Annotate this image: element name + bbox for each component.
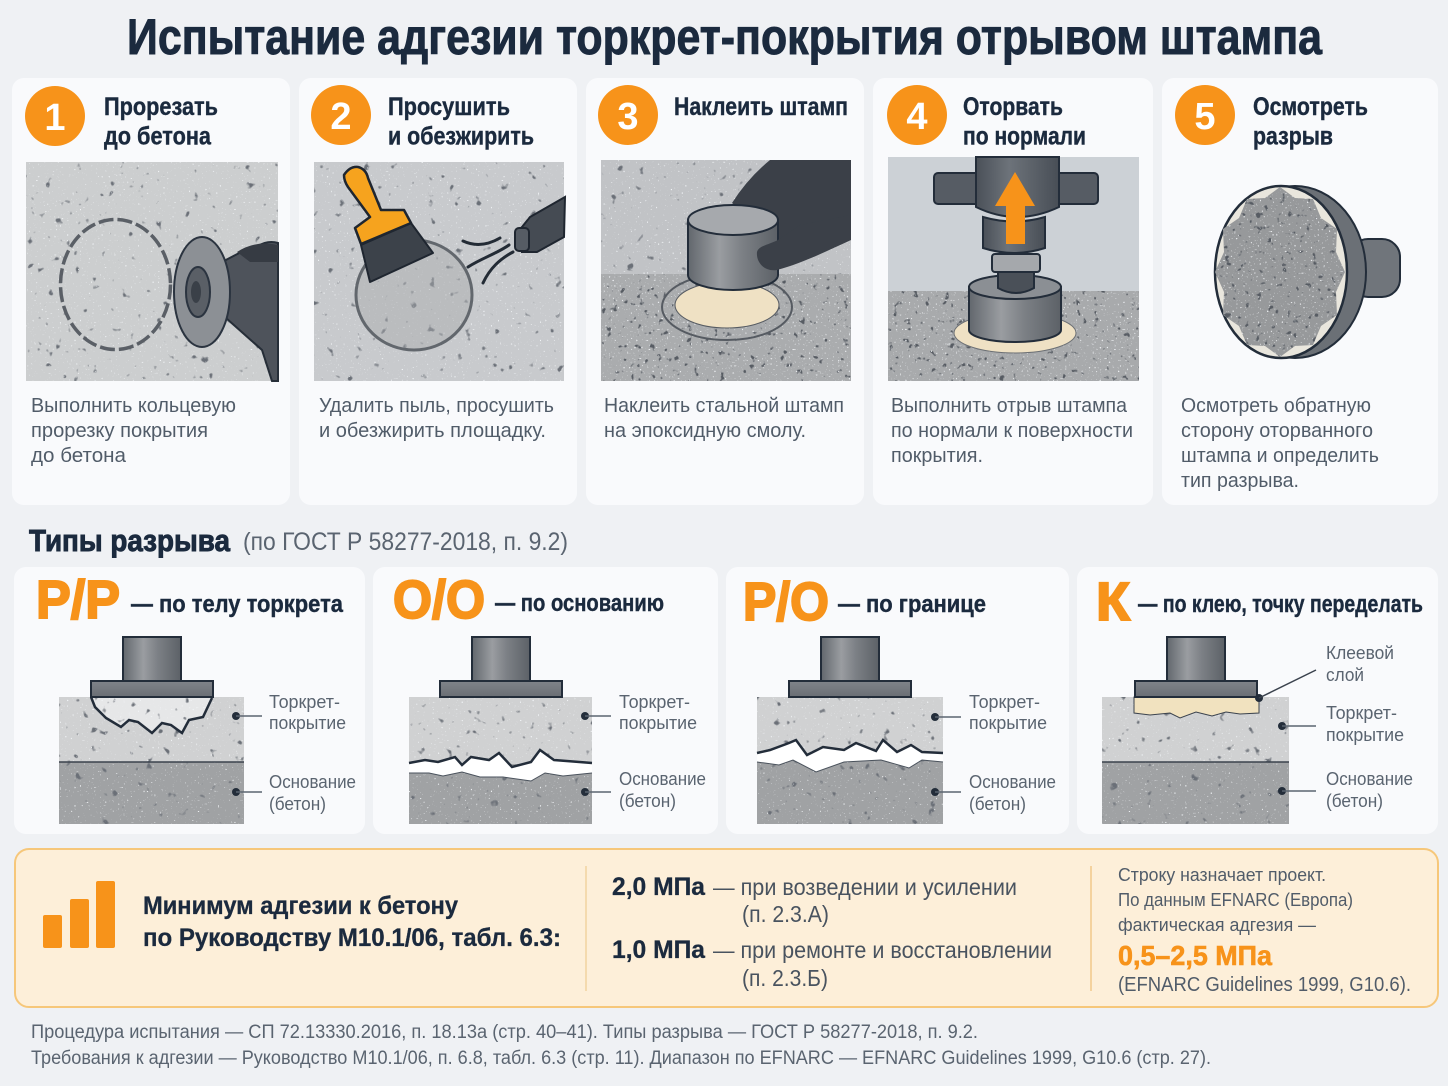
labels with leader lines: Торкрет- — [1326, 702, 1397, 723]
panel: К failure — [1077, 567, 1438, 834]
labels with leader lines: слой — [1326, 664, 1364, 685]
panel: adhesion requirements — [15, 849, 1438, 1007]
illustration: torn-off dolly — [1215, 186, 1400, 358]
step number 5: 5 — [1194, 96, 1216, 138]
requirement values: (п. 2.3.Б) — [742, 965, 828, 991]
step number 4 — [887, 85, 947, 145]
step text 3: Наклеить стальной штамп — [604, 395, 844, 417]
step text 2 — [319, 395, 554, 442]
requirement values: (п. 2.3.А) — [742, 901, 829, 927]
panel: step 3 — [586, 78, 864, 505]
labels with leader lines: Торкрет- — [619, 691, 690, 712]
diagram: break at the interface — [757, 637, 943, 824]
step heading 1 — [104, 93, 218, 150]
labels with leader lines: (бетон) — [619, 790, 676, 811]
diagram: break in glue layer — [1102, 637, 1289, 824]
step number 5 — [1175, 85, 1235, 145]
step text 5 — [1181, 395, 1379, 492]
requirement values: 2,0 МПа — [612, 873, 706, 901]
labels with leader lines: покрытие — [1326, 724, 1404, 745]
step heading 4: Оторвать — [963, 93, 1063, 121]
failure heading К: К — [1096, 572, 1131, 632]
labels with leader lines — [232, 691, 356, 814]
diagram: break through shotcrete — [59, 637, 244, 824]
requirement values: — при ремонте и восстановлении — [713, 937, 1052, 963]
arrow: pull direction — [995, 172, 1035, 244]
panel: step 2 — [299, 78, 577, 505]
step heading 2 — [388, 93, 534, 150]
labels with leader lines: покрытие — [269, 712, 346, 733]
step heading 5: разрыв — [1253, 122, 1333, 150]
step text 2: и обезжирить площадку. — [319, 420, 546, 442]
failure heading Р/Р: — по телу торкрета — [131, 591, 344, 618]
illustration: brush and air nozzle — [314, 162, 565, 381]
labels with leader lines: Основание — [969, 771, 1056, 792]
labels with leader lines: Основание — [1326, 768, 1413, 789]
step text 4: Выполнить отрыв штампа — [891, 395, 1128, 417]
step heading 5: Осмотреть — [1253, 93, 1368, 121]
EFNARC note: (EFNARC Guidelines 1999, G10.6). — [1118, 974, 1411, 996]
step number 2: 2 — [330, 96, 352, 138]
section heading: failure types — [29, 523, 568, 558]
step heading 1: до бетона — [104, 122, 212, 150]
requirement heading — [143, 892, 561, 952]
footer sources — [31, 1022, 1211, 1069]
EFNARC note — [1118, 864, 1411, 996]
labels with leader lines — [931, 691, 1056, 814]
EFNARC note: Строку назначает проект. — [1118, 864, 1326, 885]
icon: bar chart — [43, 881, 115, 948]
step text 5: сторону оторванного — [1181, 420, 1373, 442]
failure heading О/О: О/О — [393, 570, 485, 630]
step text 3 — [604, 395, 844, 442]
panel: step 5 — [1162, 78, 1438, 505]
step text 1: прорезку покрытия — [31, 420, 208, 442]
labels with leader lines: Клеевой — [1326, 642, 1394, 663]
step text 4: покрытия. — [891, 445, 983, 467]
requirement heading: по Руководству М10.1/06, табл. 6.3: — [143, 924, 561, 952]
failure heading О/О: — по основанию — [495, 590, 664, 617]
step number 4: 4 — [906, 96, 928, 138]
labels with leader lines: (бетон) — [269, 793, 326, 814]
step heading 2: Просушить — [388, 93, 510, 121]
labels with leader lines: Основание — [269, 771, 356, 792]
step heading 1: Прорезать — [104, 93, 218, 121]
step text 4 — [891, 395, 1133, 467]
labels with leader lines — [1255, 642, 1413, 811]
step text 5: тип разрыва. — [1181, 470, 1299, 492]
step number 3: 3 — [617, 96, 639, 138]
illustration: gluing the dolly — [601, 160, 851, 381]
labels with leader lines: (бетон) — [969, 793, 1026, 814]
step heading 4: по нормали — [963, 122, 1086, 150]
footer sources: Процедура испытания — СП 72.13330.2016, п. 18.13а (стр. 40–41). Типы разрыва — ГОСТ Р 58277-2018, п. 9.2. — [31, 1022, 978, 1043]
failure heading Р/Р: Р/Р — [36, 570, 120, 630]
step text 1: Выполнить кольцевую — [31, 395, 236, 417]
step text 4: по нормали к поверхности — [891, 420, 1133, 442]
labels with leader lines: Основание — [619, 768, 706, 789]
EFNARC note: 0,5–2,5 МПа — [1118, 940, 1272, 971]
step text 5: Осмотреть обратную — [1181, 395, 1371, 417]
step text 5: штампа и определить — [1181, 445, 1379, 467]
section heading: failure types: (по ГОСТ Р 58277-2018, п. 9.2) — [243, 528, 568, 556]
step number 3 — [598, 85, 658, 145]
step heading 5 — [1253, 93, 1368, 150]
panel: step 4 — [873, 78, 1153, 505]
failure heading Р/О: Р/О — [743, 572, 829, 632]
step text 1: до бетона — [31, 445, 127, 467]
labels with leader lines — [581, 691, 706, 811]
labels with leader lines: покрытие — [619, 712, 697, 733]
labels with leader lines: Торкрет- — [269, 691, 340, 712]
labels with leader lines: (бетон) — [1326, 790, 1383, 811]
requirement values — [612, 873, 1052, 991]
requirement values: 1,0 МПа — [612, 936, 706, 964]
failure heading Р/О: — по границе — [838, 591, 986, 618]
step heading 4 — [963, 93, 1086, 150]
failure heading Р/О — [743, 572, 986, 632]
step number 1 — [25, 86, 85, 146]
panel: step 1 — [12, 78, 290, 505]
panel: Р/О failure — [726, 567, 1069, 834]
step heading 2: и обезжирить — [388, 122, 534, 150]
panel: Р/Р failure — [14, 567, 365, 834]
step text 2: Удалить пыль, просушить — [319, 395, 554, 417]
step number 2 — [311, 85, 371, 145]
failure heading О/О — [393, 570, 664, 630]
illustration: grinder cutting a ring — [26, 162, 278, 381]
illustration: pull-off tester — [888, 157, 1139, 381]
panel: О/О failure — [373, 567, 718, 834]
footer sources: Требования к адгезии — Руководство М10.1/06, п. 6.8, табл. 6.3 (стр. 11). Диапазон по EFNARC — EFNARC Guidelines 1999, G10.6 (стр. 27). — [31, 1048, 1211, 1069]
EFNARC note: фактическая адгезия — — [1118, 914, 1316, 935]
failure heading Р/Р — [36, 570, 344, 630]
step text 3: на эпоксидную смолу. — [604, 420, 806, 442]
labels with leader lines: покрытие — [969, 712, 1047, 733]
section heading: failure types: Типы разрыва — [29, 523, 231, 558]
requirement values: — при возведении и усилении — [713, 874, 1017, 900]
step text 1 — [31, 395, 236, 467]
EFNARC note: По данным EFNARC (Европа) — [1118, 889, 1353, 910]
requirement heading: Минимум адгезии к бетону — [143, 892, 458, 920]
step heading 3: Наклеить штамп — [674, 93, 848, 121]
diagram: break through base — [409, 637, 592, 824]
labels with leader lines: Торкрет- — [969, 691, 1040, 712]
step number 1: 1 — [44, 97, 66, 139]
failure heading К — [1096, 572, 1423, 632]
